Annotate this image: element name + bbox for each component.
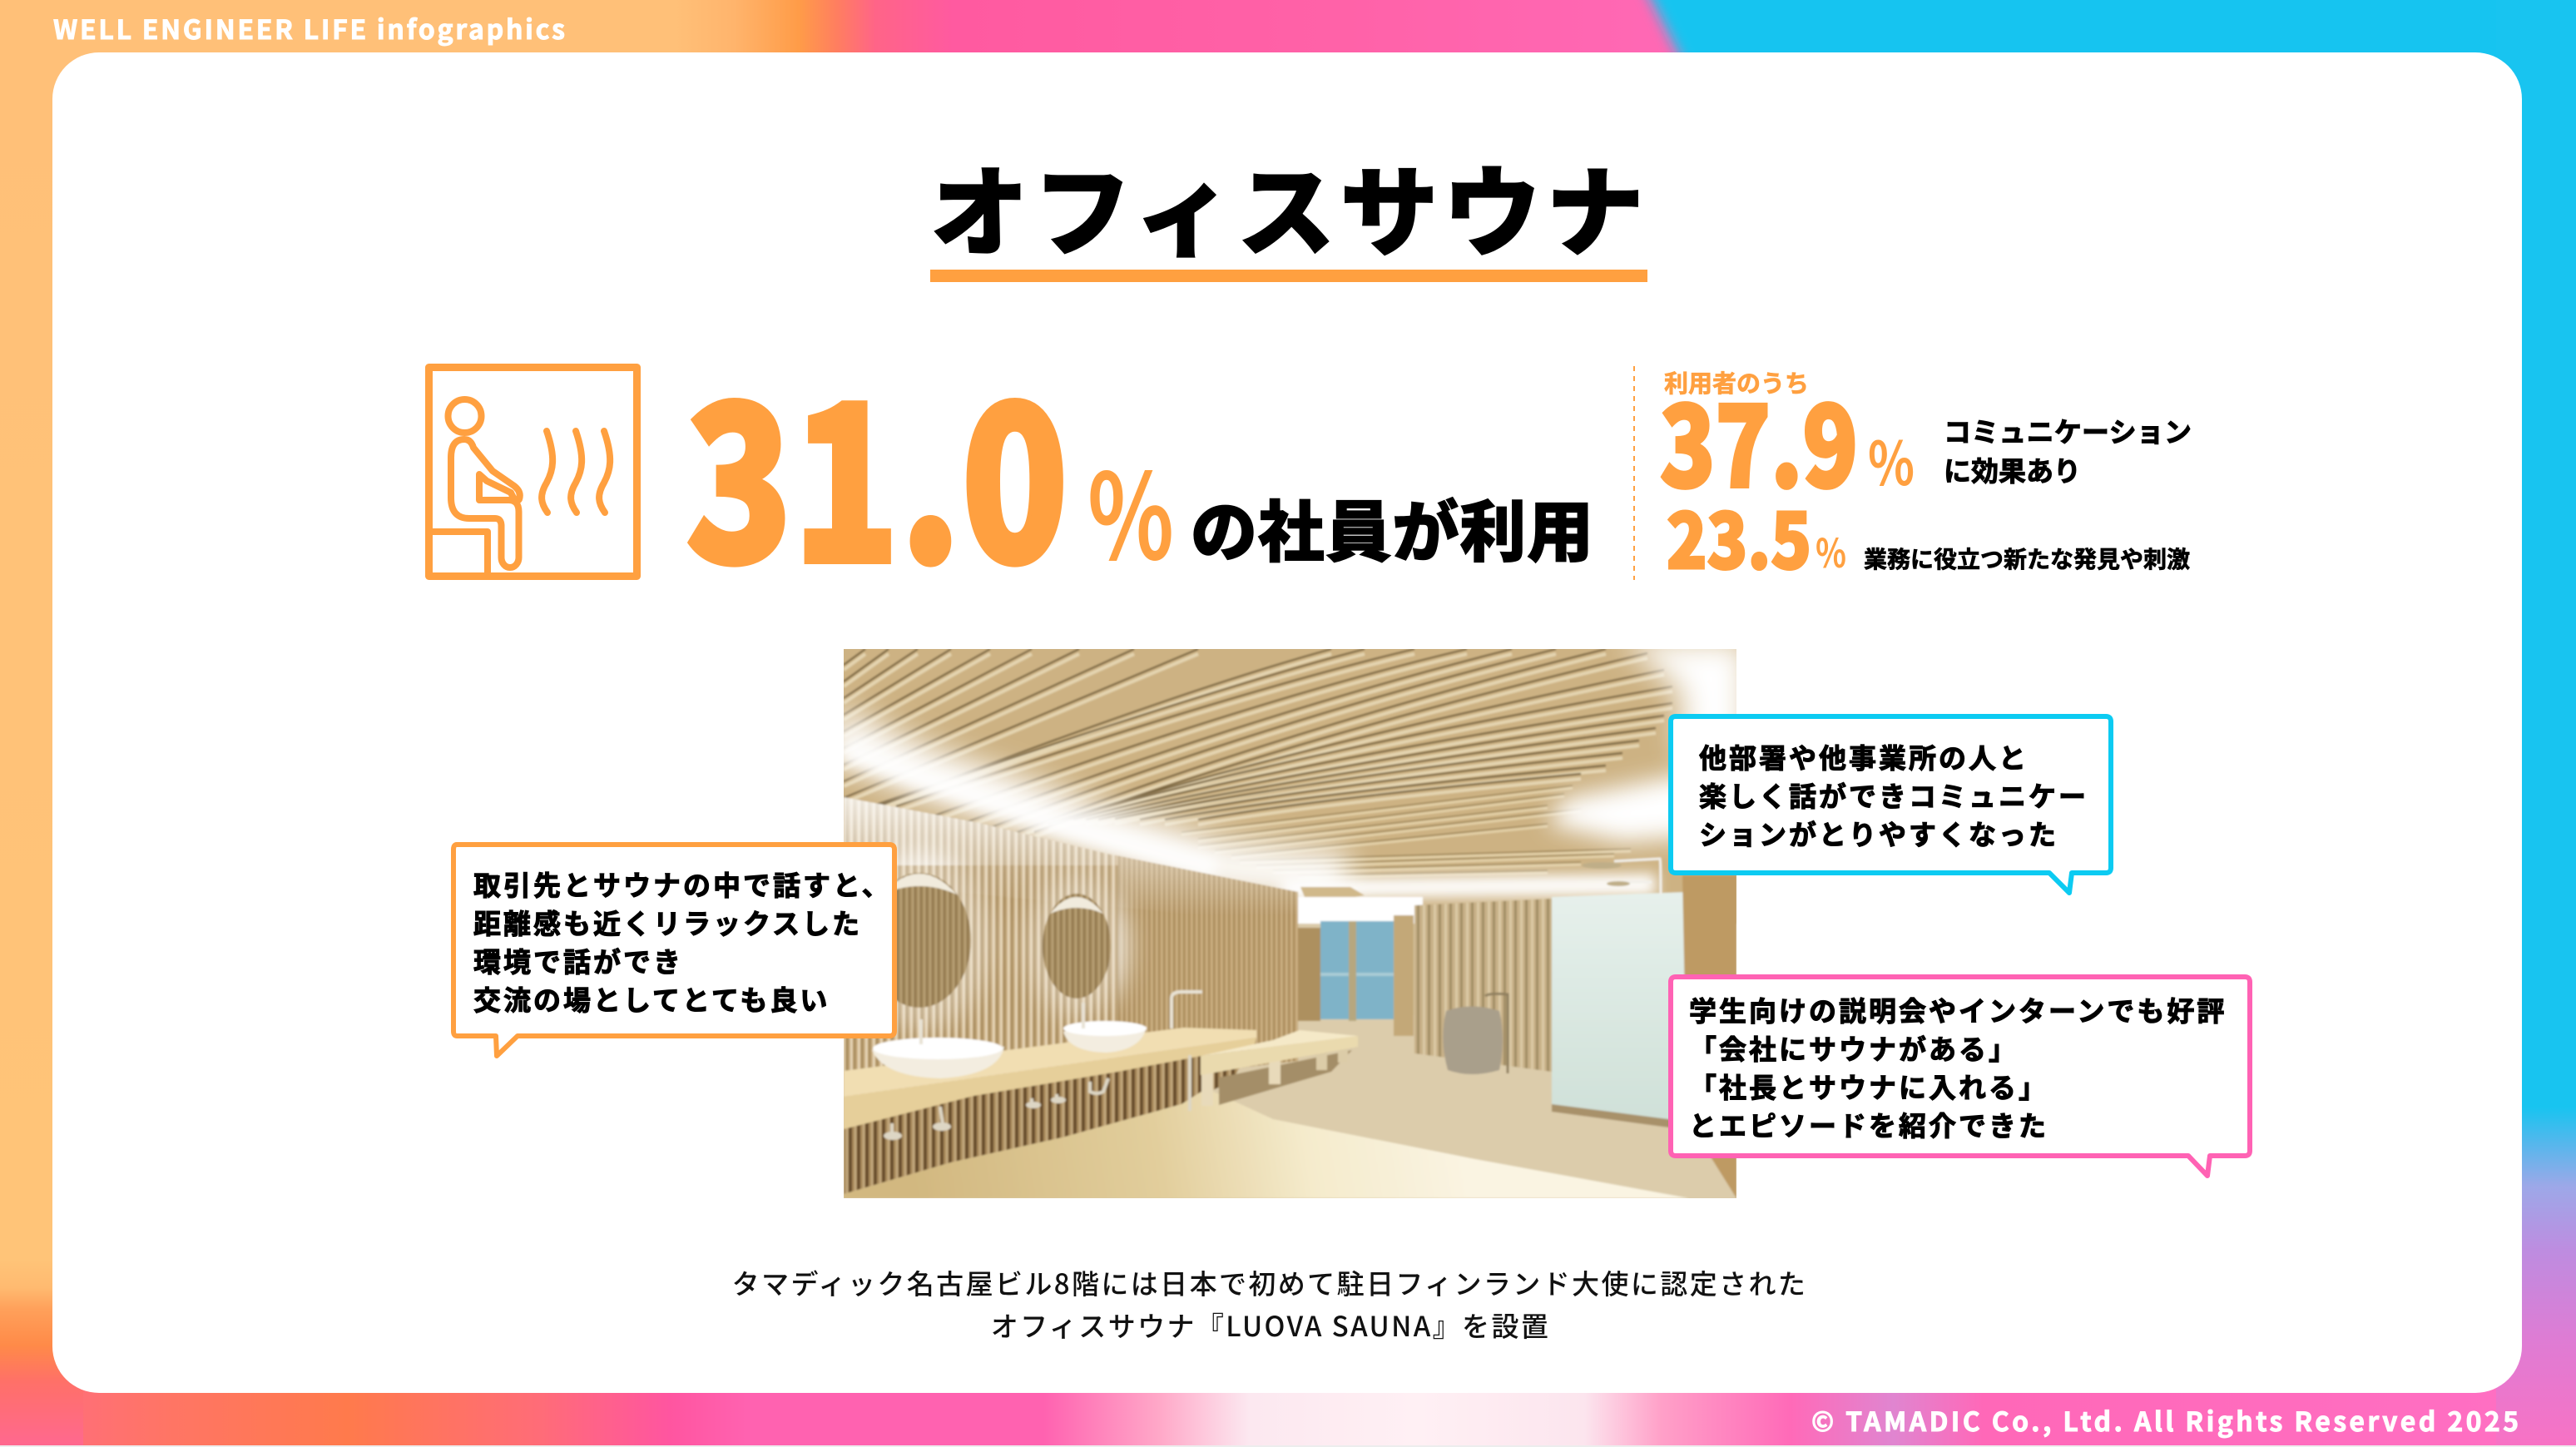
speech bubble: cyan: ションがとりやすくなった — [1699, 813, 2058, 853]
round mirrors — [897, 872, 1112, 1008]
stone floor — [844, 1015, 1736, 1198]
speech bubble: orange — [453, 845, 894, 1056]
caption: タマディック名古屋ビル8階には日本で初めて駐日フィンランド大使に認定された — [732, 1262, 1807, 1302]
wood floor — [844, 1088, 1689, 1198]
speech bubble: pink: とエピソードを紹介できた — [1689, 1104, 2048, 1144]
statistic 37.9%: % — [1868, 415, 1915, 503]
caption — [732, 1262, 1807, 1345]
frosted glass partition — [1552, 892, 1687, 1130]
counter — [844, 1028, 1256, 1129]
back corridor blue doors — [1298, 915, 1414, 1036]
statistic 23.5%: % — [1816, 521, 1846, 579]
sinks and faucets — [872, 992, 1202, 1140]
speech bubble: orange: 交流の場としてとても良い — [473, 979, 830, 1018]
statistic 37.9%: コミュニケーション — [1944, 410, 2192, 450]
speech bubble: cyan: 他部署や他事業所の人と — [1699, 736, 2029, 776]
right wall — [1682, 875, 1736, 1198]
ceiling — [832, 641, 1747, 924]
bench — [1201, 1030, 1358, 1106]
stone basin — [1443, 994, 1508, 1074]
caption: オフィスサウナ『LUOVA SAUNA』を設置 — [991, 1305, 1550, 1345]
sub heading: 利用者のうち — [1664, 364, 1809, 399]
statistic 37.9% — [1660, 359, 2192, 519]
title underline — [930, 270, 1647, 282]
speech bubble: orange: 取引先とサウナの中で話すと、 — [473, 864, 892, 904]
speech bubble: orange: 距離感も近くリラックスした — [473, 902, 862, 942]
main statistic caption: の社員が利用 — [1191, 479, 1593, 576]
shower fixture — [1614, 859, 1661, 894]
left slatted wall — [844, 795, 1300, 1072]
speech bubble: pink — [1671, 977, 2250, 1176]
statistic 23.5%: 23.5 — [1667, 481, 1811, 591]
speech bubble: pink: 「会社にサウナがある」 — [1689, 1028, 2019, 1068]
statistic 23.5%: 業務に役立つ新たな発見や刺激 — [1864, 542, 2190, 575]
statistic 37.9%: 37.9 — [1660, 359, 1858, 519]
back slatted wall — [1414, 899, 1552, 1072]
speech bubble: orange: 環境で話ができ — [473, 940, 683, 980]
speech bubble: cyan: 楽しく話ができコミュニケー — [1699, 775, 2088, 815]
speech bubble: pink: 「社長とサウナに入れる」 — [1689, 1066, 2048, 1106]
statistic 37.9%: に効果あり — [1944, 449, 2081, 489]
speech bubble: pink: 学生向けの説明会やインターンでも好評 — [1689, 989, 2227, 1029]
sub statistics — [1660, 359, 2192, 591]
header label: WELL ENGINEER LIFE infographics — [53, 9, 565, 47]
dashed divider — [1633, 366, 1635, 580]
icon: person in sauna — [429, 368, 637, 577]
speech bubble: cyan — [1671, 716, 2111, 893]
photo: office sauna interior — [832, 641, 1747, 1207]
main statistic 31.0%: 31.0 — [686, 315, 1068, 623]
main statistic 31.0%: % — [1087, 422, 1174, 593]
statistic 23.5% — [1667, 481, 2190, 591]
footer copyright: © TAMADIC Co., Ltd. All Rights Reserved 2025 — [1811, 1401, 2519, 1440]
title: オフィスサウナ — [930, 134, 1644, 276]
under-counter slats — [844, 1055, 1240, 1195]
